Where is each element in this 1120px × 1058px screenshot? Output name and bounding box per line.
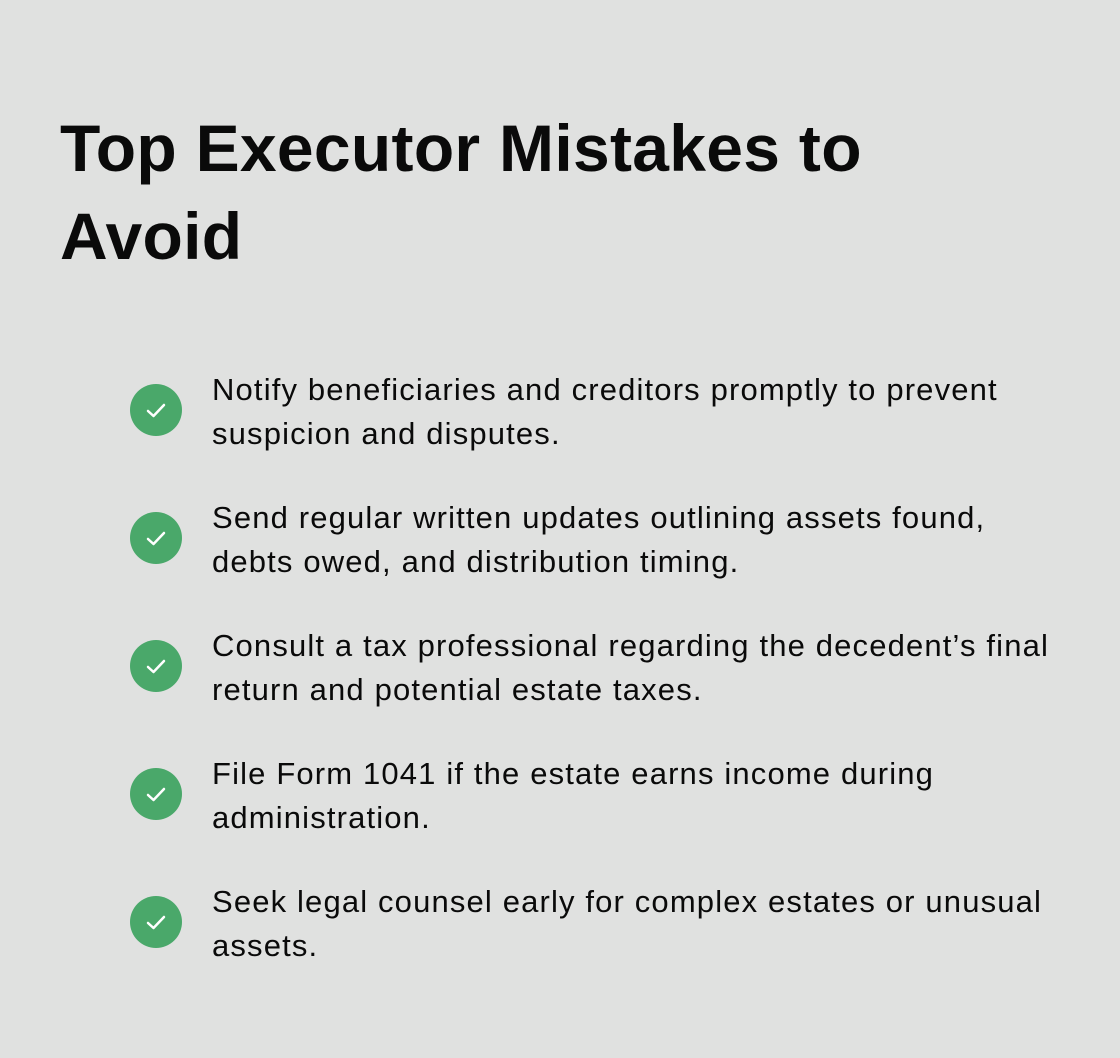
title: Avoid <box>60 199 242 273</box>
text <box>212 628 1049 707</box>
text: Notify beneficiaries and creditors promptly to prevent <box>212 372 998 407</box>
text: Send regular written updates outlining assets found, <box>212 500 985 535</box>
icon: check <box>130 384 182 436</box>
item 2 <box>130 500 985 579</box>
icon: check <box>130 640 182 692</box>
text: return and potential estate taxes. <box>212 672 703 707</box>
text: assets. <box>212 928 318 963</box>
icon: check <box>130 768 182 820</box>
title: Top Executor Mistakes to <box>60 111 862 185</box>
text: administration. <box>212 800 431 835</box>
item 4 <box>130 756 934 835</box>
text <box>212 884 1042 963</box>
text: Seek legal counsel early for complex estates or unusual <box>212 884 1042 919</box>
item 5 <box>130 884 1042 963</box>
item 3 <box>130 628 1049 707</box>
text <box>212 372 998 451</box>
title <box>60 111 862 273</box>
text: suspicion and disputes. <box>212 416 561 451</box>
text <box>212 500 985 579</box>
item 1 <box>130 372 998 451</box>
text: Consult a tax professional regarding the decedent’s final <box>212 628 1049 663</box>
icon: check <box>130 512 182 564</box>
text: debts owed, and distribution timing. <box>212 544 739 579</box>
text <box>212 756 934 835</box>
icon: check <box>130 896 182 948</box>
text: File Form 1041 if the estate earns income during <box>212 756 934 791</box>
